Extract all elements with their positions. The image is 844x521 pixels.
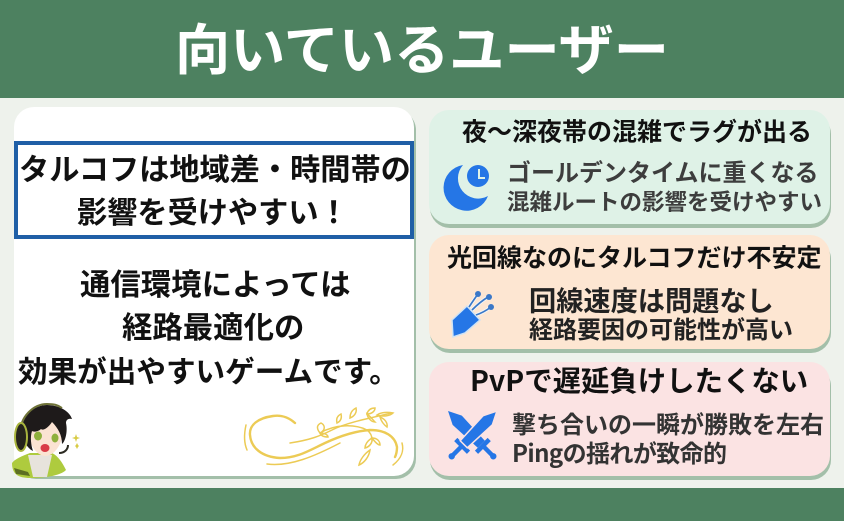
panel: PvP latency [429,362,830,476]
ear cup [15,423,27,451]
microphone [59,445,68,453]
header band [0,0,844,98]
card text [512,405,824,469]
icon: crossed swords [448,411,496,460]
card text: 回線速度は問題なし [529,278,774,318]
headset band [20,404,62,434]
card heading: PvPで遅延負けしたくない [470,359,808,400]
card text: 撃ち合いの一瞬が勝敗を左右 [512,405,824,440]
card text: 経路要因の可能性が高い [529,310,793,345]
card text: 混雑ルートの影響を受けやすい [507,185,822,217]
callout line 1: タルコフは地域差・時間帯の [19,145,411,189]
icon: headset avatar [12,403,80,478]
body text: 経路最適化の [122,303,304,347]
sparkles [72,434,80,449]
mouth [40,444,50,452]
icon: ornamental wheat flourish [244,406,404,466]
face [28,418,63,456]
body text: 効果が出やすいゲームです。 [18,348,399,391]
card heading: 光回線なのにタルコフだけ不安定 [447,238,822,274]
card text [529,278,793,345]
card text: Pingの揺れが致命的 [512,434,726,469]
icon: fiber optic cable [451,291,494,338]
panel: fiber instability [429,235,830,349]
card heading: 夜～深夜帯の混雑でラグが出る [462,112,812,148]
hair [22,405,72,451]
shirt [28,455,52,477]
body text: 通信環境によっては [80,260,350,304]
card text: ゴールデンタイムに重くなる [507,153,819,188]
panel: main message [14,107,414,476]
jacket [12,453,66,478]
card text [507,153,822,217]
footer band [0,488,844,521]
callout: highlighted statement [14,141,414,239]
eyes [34,432,42,440]
callout line 2: 影響を受けやすい！ [77,188,349,232]
title: 向いているユーザー [175,5,669,85]
panel: evening congestion [429,110,830,224]
body text [18,260,399,391]
icon: moon and clock [444,165,489,211]
